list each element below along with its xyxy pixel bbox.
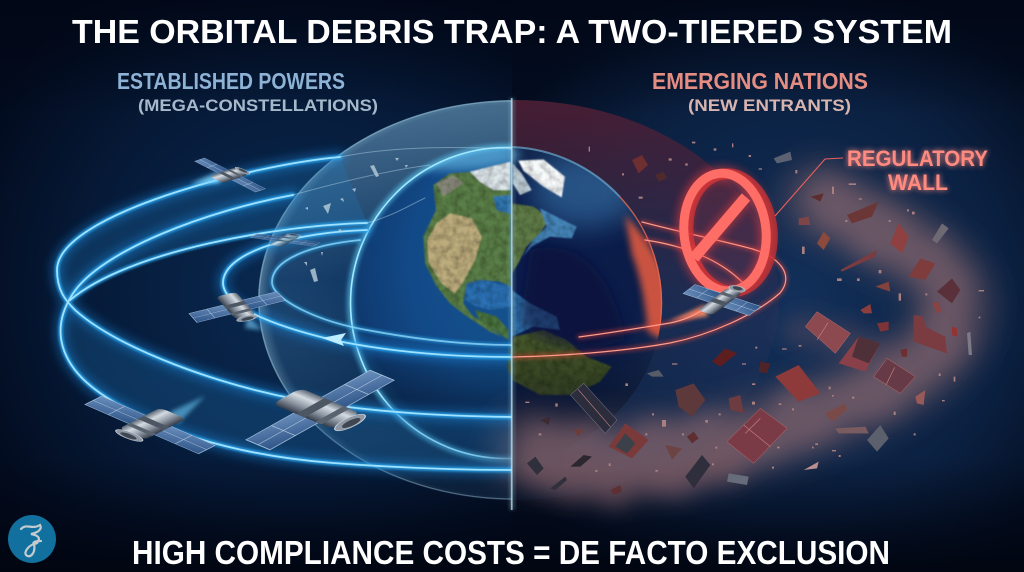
labrador snow xyxy=(513,163,532,195)
title: THE ORBITAL DEBRIS TRAP: A TWO-TIERED SYSTEM xyxy=(72,13,952,50)
satellite: red blocked xyxy=(672,276,773,324)
satellite: faded mid xyxy=(244,230,327,250)
earth globe xyxy=(350,140,674,459)
icon: regulatory wall prohibition sign xyxy=(678,169,778,296)
earth: right rim xyxy=(512,147,662,325)
orbit ribbons: translucent bands xyxy=(57,157,512,470)
debris: medium fragments xyxy=(527,152,972,495)
caribbean xyxy=(512,290,560,337)
red orbit lines xyxy=(512,222,786,357)
satellite: lower left xyxy=(68,389,230,462)
eastern north america xyxy=(512,203,550,273)
earth: atmosphere tint upper xyxy=(530,152,640,228)
earth: lit left half xyxy=(352,149,512,454)
callout label: regulatory wall: WALL xyxy=(888,170,948,195)
orbit lines: bright core xyxy=(57,157,512,470)
bottom statement: HIGH COMPLIANCE COSTS = DE FACTO EXCLUSION xyxy=(132,534,890,571)
debris shards in the shell xyxy=(304,158,408,282)
gulf of mexico xyxy=(465,280,511,310)
earth: continents xyxy=(350,140,674,459)
debris: large solar panel fragments xyxy=(570,312,915,463)
orbit lines: faint arcs over shell xyxy=(293,147,512,223)
haze: wispy core xyxy=(535,205,950,485)
sign: glow xyxy=(678,169,772,295)
heading: emerging nations: EMERGING NATIONS xyxy=(652,68,868,94)
greenland xyxy=(518,159,565,197)
earth: dark right half xyxy=(512,148,652,413)
atlantic shelf xyxy=(523,208,577,257)
center divider line xyxy=(509,98,515,510)
earth: cyan limb glow xyxy=(344,142,512,464)
canadian arctic xyxy=(470,162,511,190)
earth: red sunset limb xyxy=(621,213,662,342)
heading: established powers: ESTABLISHED POWERS xyxy=(117,68,345,94)
heading: established powers xyxy=(117,68,378,115)
satellite: upper left xyxy=(186,154,275,195)
north america landmass xyxy=(423,164,511,337)
debris field xyxy=(525,142,984,495)
heading: emerging nations: (NEW ENTRANTS) xyxy=(688,96,851,115)
callout: leader line to regulatory wall xyxy=(775,158,843,216)
heading: established powers: (MEGA-CONSTELLATIONS) xyxy=(138,96,378,115)
debris: wrecked satellites xyxy=(609,223,935,458)
heading: emerging nations xyxy=(652,68,868,115)
haze: soft outer xyxy=(530,200,955,457)
hudson bay xyxy=(493,195,511,214)
callout label: regulatory wall xyxy=(847,146,988,195)
thruster glows xyxy=(170,172,708,424)
protective shell: right half xyxy=(512,100,779,500)
debris haze cloud xyxy=(530,200,955,485)
protective shell: left half xyxy=(258,100,512,500)
icon: publisher logo badge xyxy=(8,515,56,563)
satellite: mid left xyxy=(182,283,293,332)
orbit lines: blue glow xyxy=(57,147,512,470)
central america xyxy=(475,310,508,340)
sign: face xyxy=(678,169,772,295)
earth: night side deep ocean xyxy=(520,248,625,350)
western desert xyxy=(427,213,482,293)
debris: small specks xyxy=(525,142,984,472)
sign: extruded dark edge xyxy=(682,170,778,296)
south america xyxy=(507,330,612,395)
satellite: large front xyxy=(224,361,418,460)
callout label: regulatory wall: REGULATORY xyxy=(847,146,988,171)
icon: orbit direction arrow xyxy=(322,333,346,346)
